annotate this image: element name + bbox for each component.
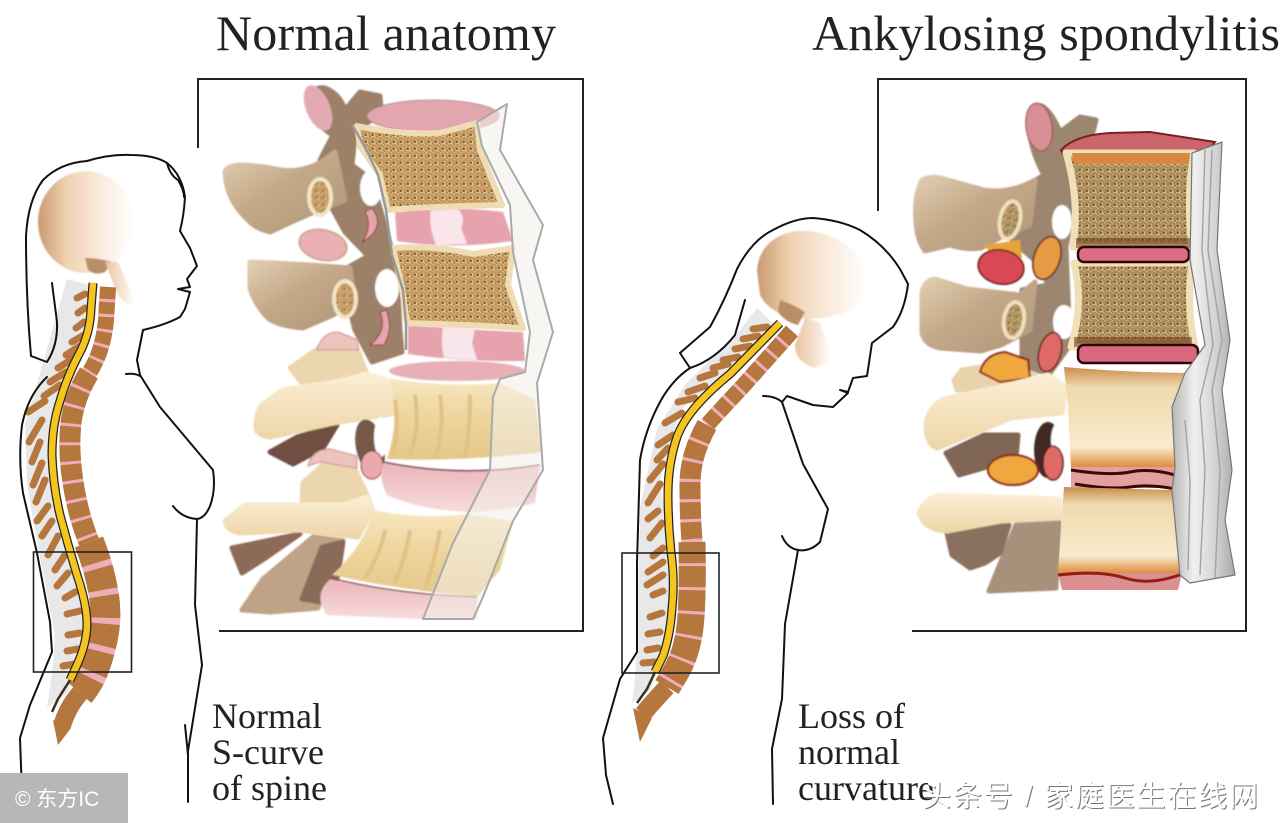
fused vertebral bodies (1058, 132, 1215, 590)
skull (757, 231, 868, 368)
inset frame (878, 79, 1246, 631)
watermark: source: 头条号 / 家庭医生在线网 (923, 781, 1259, 814)
title: Normal anatomy: Normal anatomy (216, 5, 556, 61)
spinous processes (643, 327, 767, 663)
upper posterior elements (916, 101, 1096, 374)
thickened calcified ligament (1172, 142, 1235, 583)
body outline (603, 218, 908, 804)
lumbar vertebral bodies and discs (320, 379, 542, 619)
label: Normal S-curve of spine: Normal (212, 696, 322, 736)
vertebral column (53, 287, 108, 745)
skull (38, 171, 135, 305)
spinal cord (637, 323, 780, 703)
label: Normal S-curve of spine: of spine (212, 768, 327, 808)
watermark: image credit (0, 773, 128, 823)
figure: stooped posture with ankylosed spine (603, 218, 908, 804)
lower posterior elements (225, 332, 397, 612)
label: Loss of normal curvature: curvature (798, 768, 934, 808)
spinous processes (28, 294, 85, 666)
upper posterior elements (225, 81, 402, 362)
lower posterior elements (919, 352, 1066, 591)
soft tissue band (632, 308, 775, 703)
figure: normal posture with S-curve spine (20, 155, 214, 802)
spinal cord (52, 283, 93, 712)
title: Ankylosing spondylitis: Ankylosing spondylitis (812, 5, 1280, 61)
watermark: image credit: © 东方IC (15, 788, 99, 811)
vertebral column (633, 331, 792, 742)
panel: normal anatomy inset (198, 79, 583, 631)
soft tissue band (25, 279, 90, 708)
label: Normal S-curve of spine (212, 696, 327, 808)
watermark: source: 头条号 / 家庭医生在线网 (922, 780, 1258, 813)
label: Loss of normal curvature: Loss of (798, 696, 905, 736)
inset frame (198, 79, 583, 631)
locator box (34, 552, 132, 672)
anterior ligament (423, 104, 553, 619)
panel: ankylosing spondylitis inset (878, 79, 1246, 631)
label: Normal S-curve of spine: S-curve (212, 732, 324, 772)
sectioned vertebra with spongy bone (352, 123, 523, 350)
sectioned upper discs (367, 100, 525, 381)
body outline (20, 155, 214, 802)
label: Loss of normal curvature: normal (798, 732, 900, 772)
label: Loss of normal curvature (798, 696, 934, 808)
locator box (622, 553, 719, 673)
